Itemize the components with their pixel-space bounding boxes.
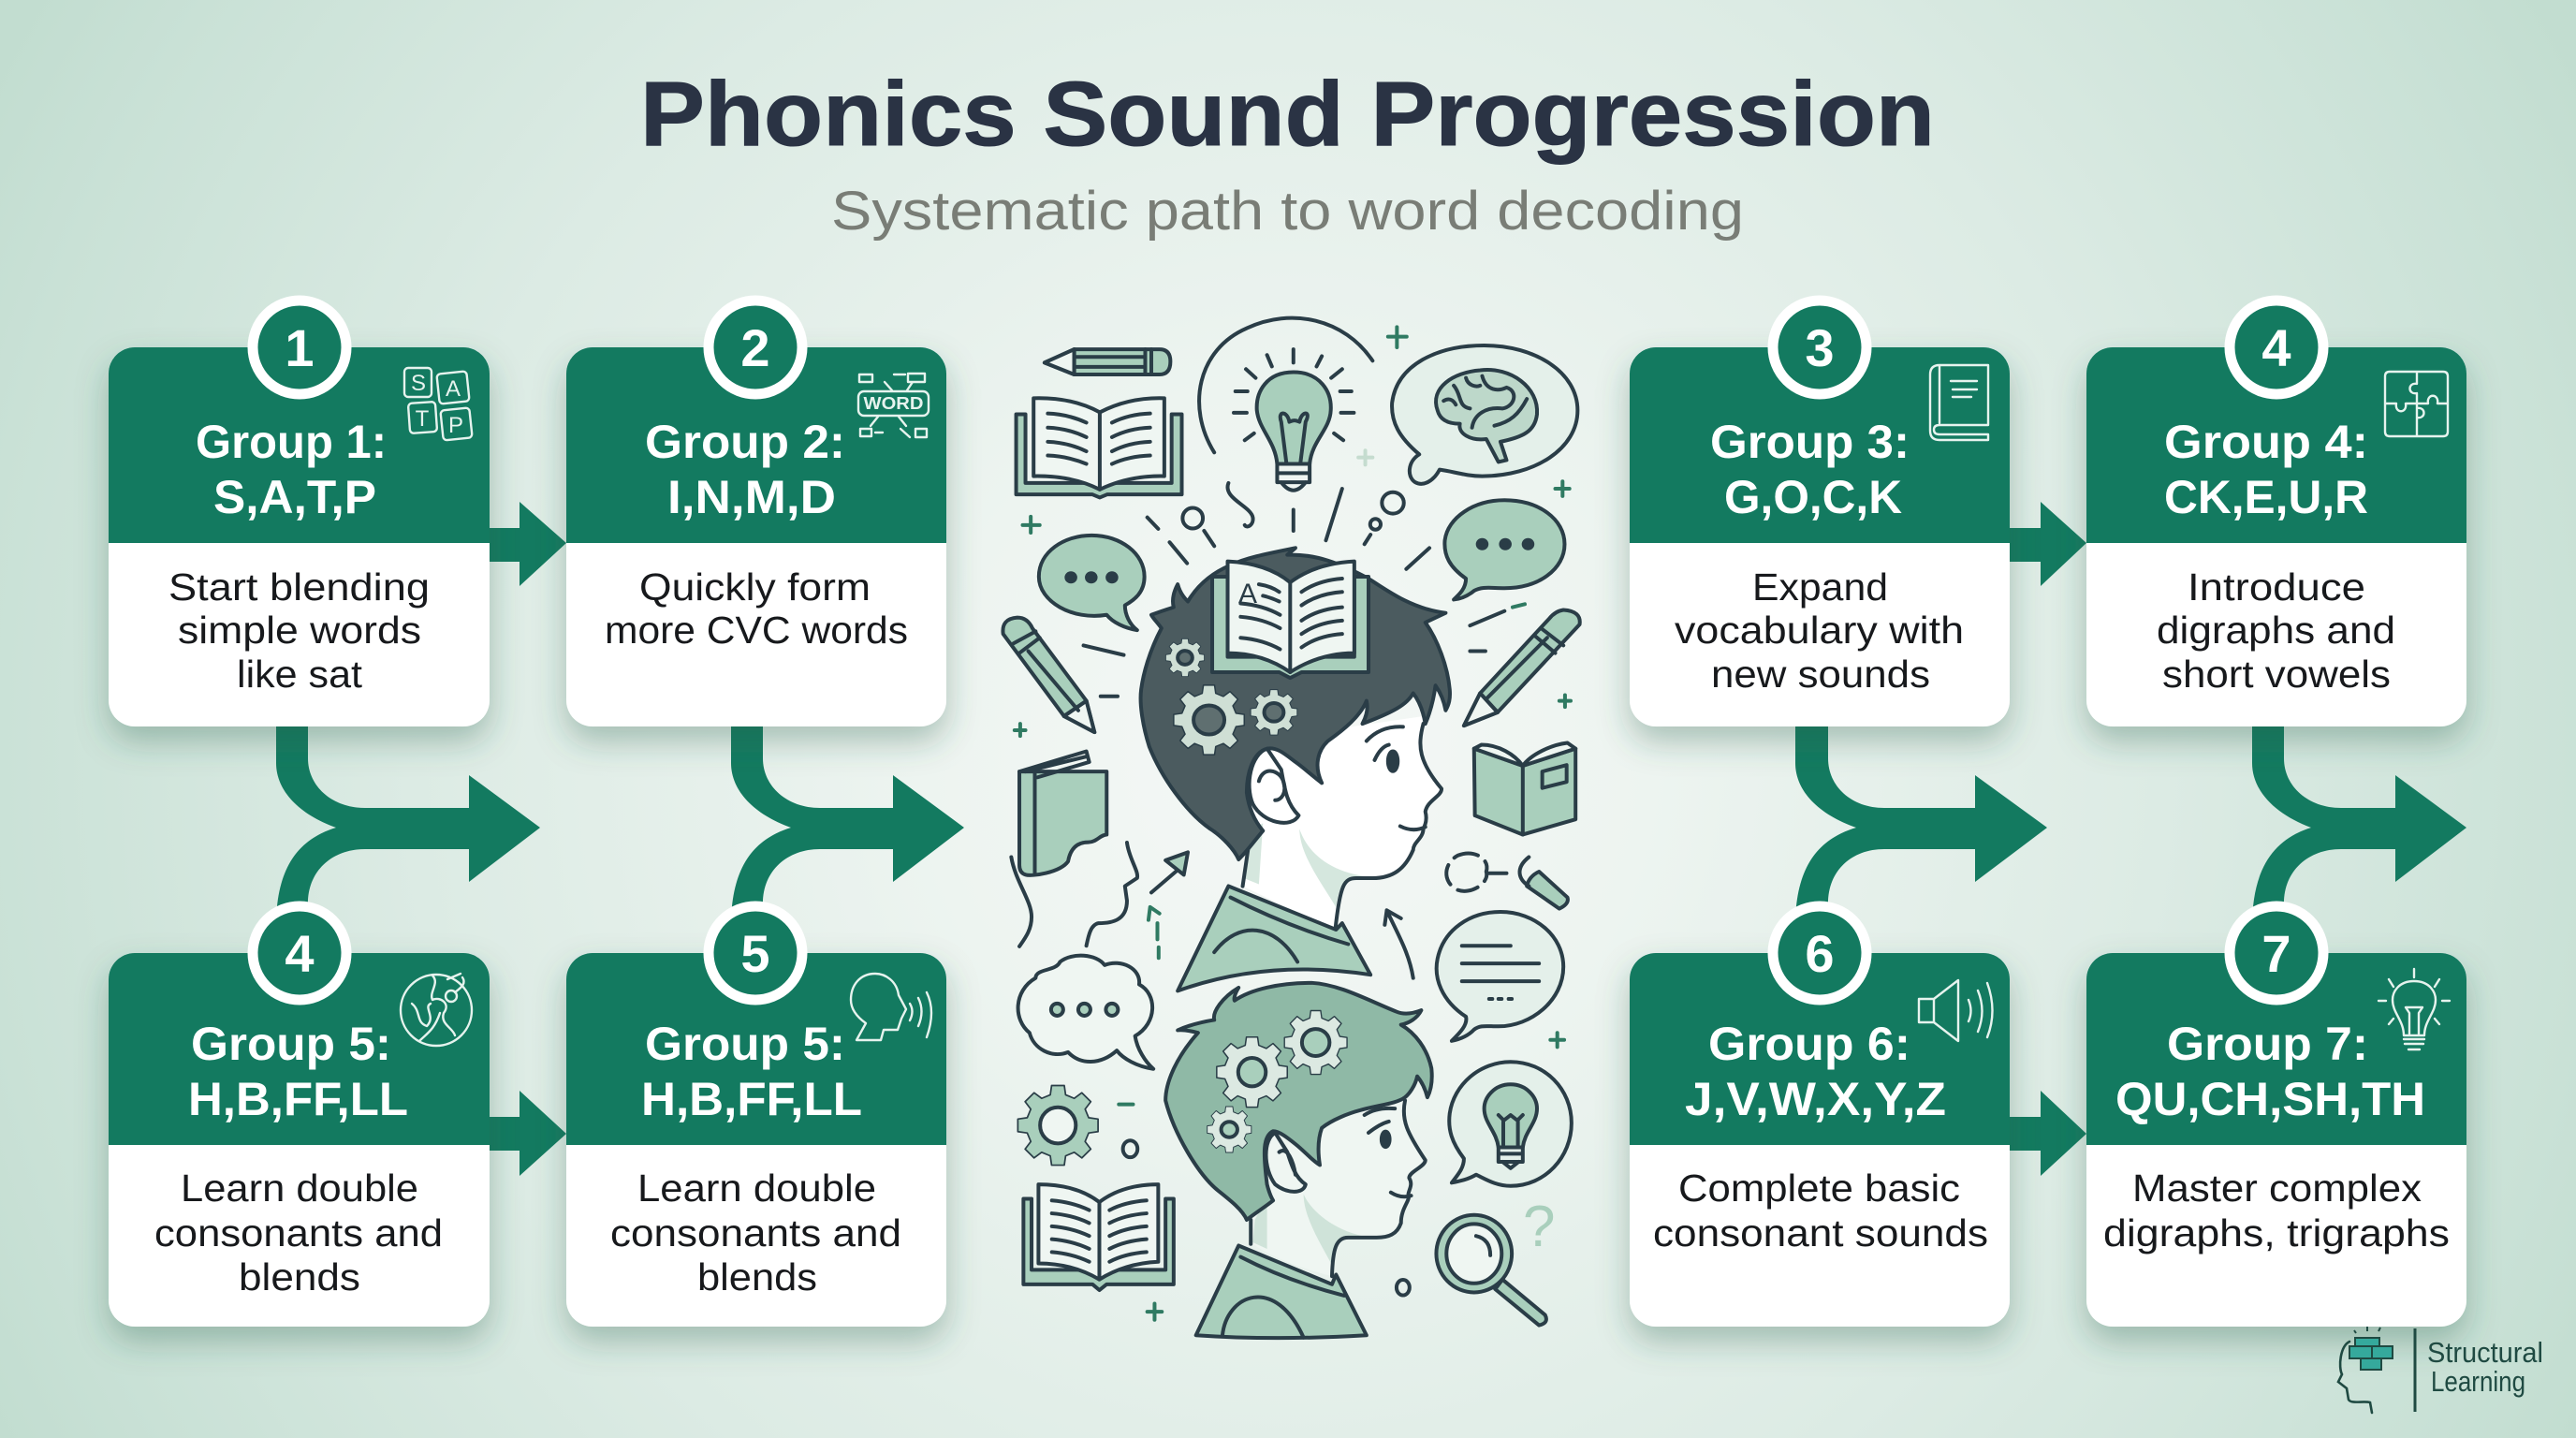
panel: card group 4 bbox=[2086, 301, 2466, 726]
icon: speaker bbox=[1919, 980, 1992, 1041]
icon: shirt lower boy bbox=[1196, 1245, 1367, 1338]
panel: card lower group 5 (step 4) bbox=[109, 906, 490, 1327]
icon: letter tiles bbox=[404, 368, 473, 440]
icon: upper boy eye bbox=[1388, 751, 1398, 771]
icon: light bulb bbox=[2378, 969, 2450, 1049]
icon: speech bubble left bbox=[1039, 536, 1145, 630]
illustration: central learning collage bbox=[1003, 318, 1580, 1338]
icon: green book bbox=[1474, 743, 1575, 834]
panel: card group 3: G,O,C,K bbox=[1724, 471, 1902, 523]
panel: card lower group 5 (step 5) bbox=[566, 906, 946, 1327]
panel: card lower group 5 (step 5): 5 bbox=[740, 924, 770, 983]
panel: card group 4: digraphs and bbox=[2157, 609, 2395, 652]
icon: word chain bbox=[858, 374, 929, 437]
branch arrow 3 bbox=[1795, 721, 2047, 927]
icon: letter tiles: T bbox=[416, 406, 430, 432]
panel: card group 7: QU,CH,SH,TH bbox=[2115, 1073, 2425, 1125]
icon: puzzle bbox=[2385, 372, 2448, 436]
panel: card group 3: new sounds bbox=[1711, 653, 1930, 696]
icon: lower boy hair bbox=[1165, 983, 1432, 1220]
panel: card group 1: Start blending bbox=[168, 565, 430, 609]
branch arrow 2 bbox=[731, 721, 964, 927]
icon: upper boy gears bbox=[1165, 638, 1297, 755]
panel: card group 4: CK,E,U,R bbox=[2164, 471, 2368, 523]
icon: speaking head bbox=[851, 974, 931, 1040]
icon: lower boy gears bbox=[1208, 1011, 1347, 1152]
icon: arc around bulb bbox=[1199, 318, 1372, 452]
panel: card group 3: 3 bbox=[1805, 318, 1835, 377]
panel: card group 1: S,A,T,P bbox=[213, 471, 376, 523]
icon: magnifying glass bbox=[1436, 1215, 1546, 1326]
panel: card group 7 bbox=[2086, 906, 2466, 1327]
panel: card group 6 bbox=[1630, 906, 2010, 1327]
panel: card lower group 5 (step 4): H,B,FF,LL bbox=[188, 1073, 408, 1125]
arrow: group 1 to 2 bbox=[487, 502, 566, 586]
panel: card group 2: Group 2: bbox=[645, 416, 845, 468]
icon: pencil left bbox=[1003, 618, 1094, 732]
panel: card group 4: Introduce bbox=[2188, 565, 2365, 609]
subtitle: Systematic path to word decoding bbox=[831, 181, 1744, 242]
icon: upper boy ear bbox=[1250, 749, 1298, 823]
arrow: group 3 to 4 bbox=[2007, 502, 2086, 586]
icon: pencil horizontal bbox=[1045, 349, 1170, 374]
icon: cloud speech bubble bbox=[1018, 956, 1153, 1069]
icon: lower boy face line bbox=[1251, 1101, 1426, 1276]
icon: pencil right bbox=[1464, 609, 1580, 726]
panel: card lower group 5 (step 5): H,B,FF,LL bbox=[641, 1073, 862, 1125]
panel: card group 2: I,N,M,D bbox=[667, 471, 836, 523]
logo: Structural Learning: Structural bbox=[2427, 1336, 2543, 1369]
icon: scribble and eraser bbox=[1446, 854, 1568, 909]
icon: small marks bbox=[1119, 1033, 1564, 1320]
panel: card group 6: Complete basic bbox=[1678, 1167, 1960, 1210]
icon: word chain: WORD bbox=[863, 394, 923, 413]
panel: card group 1: simple words bbox=[178, 609, 421, 652]
icon: upper boy shirt bbox=[1178, 886, 1370, 990]
lower illustration layer bbox=[1011, 843, 1572, 1338]
book page letter: A bbox=[1238, 579, 1257, 609]
panel: card group 6: 6 bbox=[1805, 924, 1835, 983]
panel: card lower group 5 (step 5): Group 5: bbox=[645, 1018, 845, 1070]
icon: small marks bbox=[1015, 327, 1571, 736]
panel: card group 2: more CVC words bbox=[605, 609, 908, 652]
panel: card group 7: digraphs, trigraphs bbox=[2103, 1211, 2450, 1255]
panel: card group 1: like sat bbox=[237, 653, 363, 696]
arrow: group 6 to 7 bbox=[2007, 1091, 2086, 1176]
panel: card group 3 bbox=[1630, 301, 2010, 726]
icon: globe bbox=[401, 974, 472, 1046]
icon: head with blocks bbox=[2338, 1327, 2393, 1413]
icon: lower boy ear bbox=[1266, 1133, 1306, 1192]
panel: card group 7: 7 bbox=[2261, 924, 2291, 983]
panel: card group 4: Group 4: bbox=[2164, 416, 2368, 468]
panel: card lower group 5 (step 5): blends bbox=[697, 1255, 817, 1299]
icon: faint profile bbox=[1011, 843, 1137, 946]
icon: light bulb bbox=[1234, 349, 1354, 491]
title: Phonics Sound Progression bbox=[640, 63, 1935, 165]
panel: card group 4: 4 bbox=[2261, 318, 2291, 377]
arrows: connectors between cards bbox=[276, 502, 2466, 1176]
panel: card group 6: J,V,W,X,Y,Z bbox=[1685, 1073, 1946, 1125]
icon: speech bubble right bbox=[1444, 500, 1564, 599]
panel: card group 2: Quickly form bbox=[639, 565, 871, 609]
icon: brain bubble bbox=[1392, 345, 1577, 484]
icon: book bbox=[1930, 365, 1988, 440]
logo: Structural Learning bbox=[2338, 1327, 2543, 1413]
logo: Structural Learning: Learning bbox=[2431, 1365, 2525, 1398]
panel: card group 1: 1 bbox=[285, 318, 315, 377]
upper illustration layer bbox=[1003, 318, 1580, 931]
panel: card group 4: short vowels bbox=[2162, 653, 2391, 696]
icon: letter tiles: P bbox=[448, 413, 463, 438]
icon: book on head bbox=[1212, 562, 1368, 678]
panel: card group 2 bbox=[566, 301, 946, 726]
panel: card group 1: Group 1: bbox=[196, 416, 387, 468]
panel: card group 2: 2 bbox=[740, 318, 770, 377]
icon: closed book bbox=[1019, 751, 1106, 875]
panel: card group 6: Group 6: bbox=[1708, 1018, 1910, 1070]
icon: up arrows bbox=[1149, 852, 1413, 978]
panel: card lower group 5 (step 5): consonants and bbox=[610, 1211, 901, 1255]
icon: letter tiles: S bbox=[411, 371, 426, 396]
icon: open book top bbox=[1017, 398, 1182, 497]
panel: card group 7: Master complex bbox=[2132, 1167, 2422, 1210]
panel: card group 3: Group 3: bbox=[1710, 416, 1910, 468]
icon: lower boy neck shading bbox=[1252, 1194, 1372, 1265]
icon: letter tiles: A bbox=[446, 376, 461, 402]
arrow: lower group 5 to 5 bbox=[487, 1091, 566, 1176]
question mark: ? bbox=[1523, 1195, 1555, 1259]
panel: card group 7: Group 7: bbox=[2167, 1018, 2368, 1070]
icon: speech bubble with lines bbox=[1437, 912, 1563, 1041]
icon: upper boy hair bbox=[1141, 548, 1450, 859]
icon: upper boy face bbox=[1243, 716, 1442, 931]
icon: lower boy face bbox=[1251, 1036, 1426, 1276]
icon: upper boy neck shading bbox=[1245, 823, 1368, 907]
panel: card lower group 5 (step 4): 4 bbox=[285, 924, 315, 983]
icon: light bulb bubble bbox=[1449, 1062, 1572, 1186]
panel: card group 6: consonant sounds bbox=[1653, 1211, 1988, 1255]
panel: card lower group 5 (step 4): Group 5: bbox=[191, 1018, 391, 1070]
icon: upper boy face line bbox=[1243, 724, 1442, 931]
panel: card group 3: Expand bbox=[1752, 565, 1888, 609]
branch arrow 1 bbox=[276, 721, 540, 927]
panel: card lower group 5 (step 5): Learn double bbox=[637, 1167, 876, 1210]
icon: open book lower bbox=[1023, 1184, 1174, 1290]
icon: gear bbox=[1017, 1086, 1098, 1166]
panel: card group 3: vocabulary with bbox=[1675, 609, 1964, 652]
icon: lower boy eye bbox=[1382, 1132, 1390, 1147]
panel: card lower group 5 (step 4): consonants and bbox=[154, 1211, 443, 1255]
panel: card lower group 5 (step 4): Learn double bbox=[181, 1167, 418, 1210]
panel: card lower group 5 (step 4): blends bbox=[239, 1255, 360, 1299]
branch arrow 4 bbox=[2252, 721, 2466, 927]
panel: card group 1 bbox=[109, 301, 490, 726]
